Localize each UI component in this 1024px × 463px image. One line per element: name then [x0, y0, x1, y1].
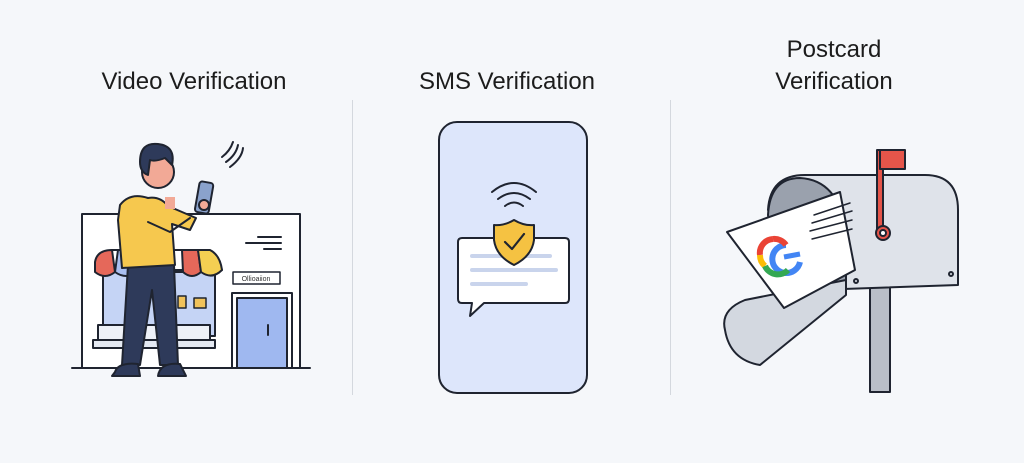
store: Ollioaiion	[242, 276, 271, 283]
title: postcard verification	[775, 36, 893, 95]
shield	[494, 220, 534, 265]
mailbox	[724, 150, 958, 392]
sms phone	[439, 122, 587, 393]
title: sms verification: SMS Verification	[419, 68, 595, 95]
message bubble	[458, 238, 569, 316]
person	[112, 142, 243, 376]
store	[72, 214, 310, 368]
title: postcard verification: Verification	[775, 68, 893, 95]
title: video verification: Video Verification	[101, 68, 286, 95]
title: postcard verification: Postcard	[787, 36, 881, 63]
